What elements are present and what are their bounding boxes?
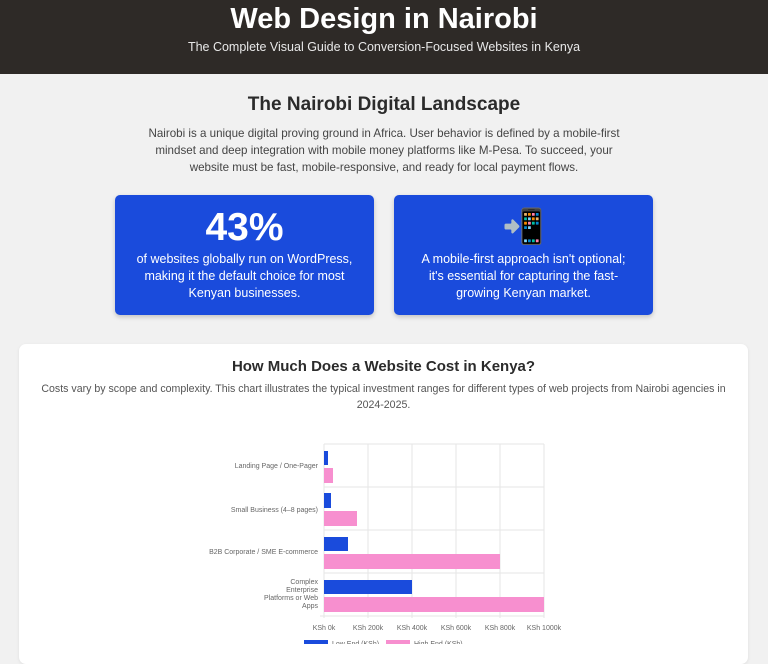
subtitle: The Complete Visual Guide to Conversion-Focused Websites in Kenya (188, 40, 580, 54)
panel: website cost (19, 344, 748, 664)
card text: A mobile-first approach isn't optional; it's essential for capturing the fast-growing Kenyan market. (422, 252, 625, 300)
category labels: Apps (302, 603, 318, 610)
icon: phone with arrow: 📲 (502, 207, 545, 247)
axis labels (313, 625, 562, 632)
chart description: Costs vary by scope and complexity. This chart illustrates the typical investment ranges for different types of web projects from Nairobi agencies in 2024-2025. (41, 383, 726, 411)
card: mobile first (394, 195, 653, 315)
bars (324, 451, 544, 612)
section heading: The Nairobi Digital Landscape (248, 94, 520, 115)
intro paragraph: Nairobi is a unique digital proving ground in Africa. User behavior is defined by a mobile-first mindset and deep integration with mobile money platforms like M-Pesa. To succeed, your website must be fast, mobile-responsive, and ready for local payment flows. (148, 127, 620, 174)
category labels: Landing Page / One-Pager (235, 463, 319, 470)
title: Web Design in Nairobi (230, 3, 538, 35)
category labels: Complex (290, 579, 318, 586)
axis labels: KSh 400k (397, 625, 428, 632)
category labels: Enterprise (286, 587, 318, 594)
category labels: Platforms or Web (264, 595, 318, 602)
header (0, 0, 768, 74)
category labels (209, 463, 319, 610)
axis labels: KSh 800k (485, 625, 516, 632)
chart title: How Much Does a Website Cost in Kenya? (232, 358, 535, 375)
axis labels: KSh 0k (313, 625, 336, 632)
card: wordpress stat (115, 195, 374, 315)
axis labels: KSh 1000k (527, 625, 562, 632)
axis labels: KSh 200k (353, 625, 384, 632)
stat number: 43% (205, 206, 284, 249)
stat text: of websites globally run on WordPress, making it the default choice for most Kenyan businesses. (137, 252, 352, 300)
category labels: Small Business (4–8 pages) (231, 507, 318, 514)
bar chart (209, 444, 562, 644)
axis labels: KSh 600k (441, 625, 472, 632)
category labels: B2B Corporate / SME E-commerce (209, 549, 318, 556)
legend (304, 640, 463, 648)
